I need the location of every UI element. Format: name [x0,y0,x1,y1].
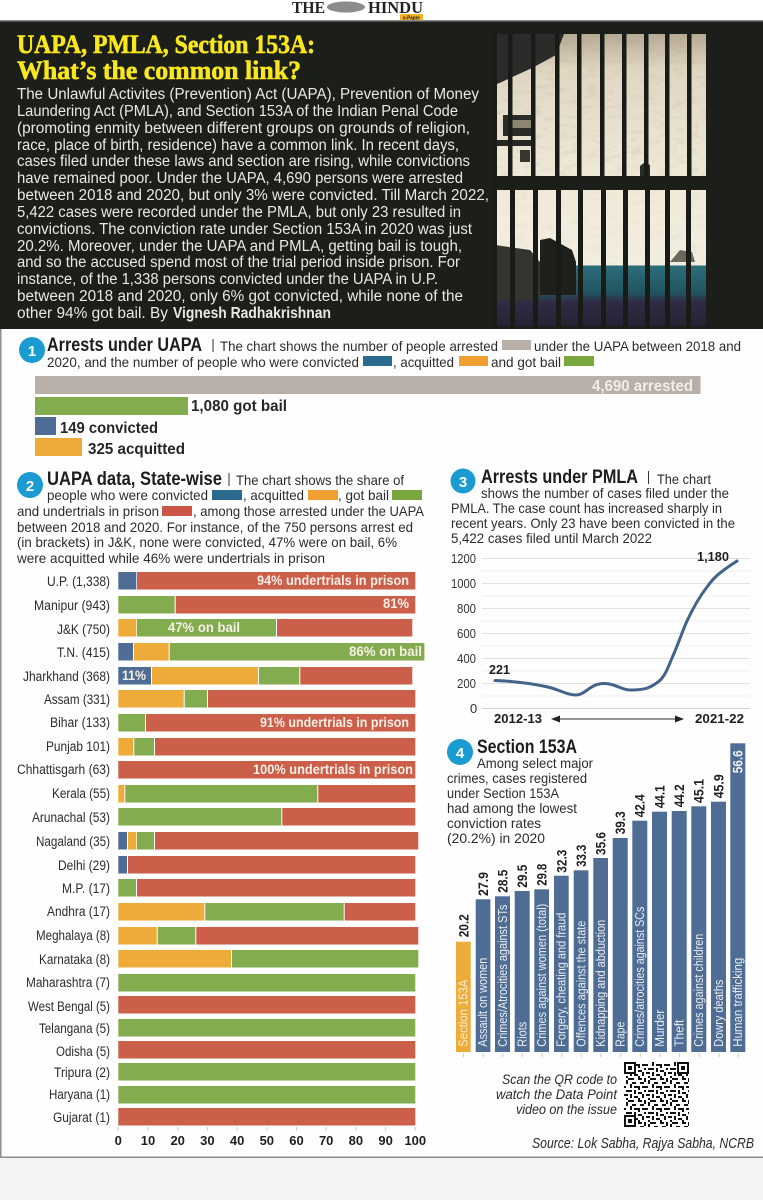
description 4: crimes, cases registered [447,770,587,786]
bar: Murder: 44.1 [652,785,668,808]
description 1: The chart shows the number of people arrested [220,338,498,354]
line chart [451,549,750,726]
intro text: Laundering Act (PMLA), and Section 153A of the Indian Penal Code [17,103,458,120]
QR call to action: Scan the QR code to [502,1072,617,1087]
intro text: race, place of birth, residence) have a common link. In recent days, [17,137,459,154]
description 4: had among the lowest [447,800,577,816]
bar: Rape: Rape [612,1022,628,1047]
arrow: timeline [551,716,684,722]
newspaper logo: e-Paper [403,16,421,22]
row: T.N. [118,643,424,660]
description 2: The chart shows the share of [236,472,404,488]
bar: Assault on women: Assault on women [475,958,490,1047]
description 2: between 2018 and 2020. For instance, of the 750 persons arrest ed [17,519,413,535]
description 1: , acquitted [393,354,454,370]
state labels: Odisha (5) [56,1044,110,1059]
line chart: 800 [457,601,476,616]
axis: percent: 100 [404,1133,426,1148]
row: Haryana [118,1086,415,1104]
state labels: Karnataka (8) [39,952,110,967]
axis: percent: 60 [289,1133,304,1148]
icon: QR code [624,1062,689,1127]
row: Arunachal [118,808,415,826]
row: Karnataka [118,950,418,968]
state labels: M.P. (17) [62,881,110,896]
photo: prison bars [491,34,706,328]
heading 2: UAPA data, State-wise [47,469,222,490]
row: J&K [118,619,412,636]
bar: Forgery, cheating and fraud: 32.3 [554,849,570,873]
row: Tripura [118,1063,415,1080]
row: J&K: 47% on bail [168,620,240,635]
state labels: J&K (750) [57,622,110,637]
bar: acquitted [35,438,185,458]
intro text: 5,422 cases were recorded under the PMLA, but only 23 resulted in [17,204,461,221]
row: Jharkhand [118,667,412,684]
row: Manipur [118,596,415,614]
QR call to action: watch the Data Point [496,1087,618,1102]
description 2: , among those arrested under the UAPA [193,503,425,519]
bar: Riots [514,864,530,1052]
state labels: Andhra (17) [47,904,110,919]
bar: Riots: Riots [514,1021,530,1047]
intro text: and so the accused spend most of the trial period inside prison. For [17,254,460,271]
bar: Forgery, cheating and fraud: Forgery, cheating and fraud [554,913,568,1047]
description 2: were acquitted while 46% were undertrials in prison [16,550,325,566]
heading 3: Arrests under PMLA [481,467,638,488]
description 2: , got bail [338,487,389,503]
bar: Crimes/Atrocities against STs: 28.5 [496,869,510,893]
intro text: (promoting enmity between different groups on grounds of religion, [17,120,470,137]
newspaper logo [0,0,763,22]
line chart: 1200 [451,551,476,566]
state labels: Punjab 101) [46,739,110,754]
description 3: recent years. Only 23 have been convicted in the [451,515,735,531]
description 4 [447,755,593,846]
row: Chhattisgarh: 100% undertrials in prison [253,762,413,777]
row: Meghalaya [118,927,418,944]
row: West Bengal [118,996,415,1014]
bar: Theft: Theft [672,1019,686,1047]
description 1: and got bail [491,354,561,370]
row: Telangana [118,1019,415,1036]
description 4: under Section 153A [447,785,560,801]
state labels: Maharashtra (7) [26,975,110,990]
QR call to action: video on the issue [516,1102,617,1117]
panel: white content area [0,329,763,1158]
row: Manipur: 81% [383,596,409,611]
line chart: 400 [457,651,476,666]
bar: Crimes/Atrocities against STs: Crimes/Atrocities against STs [495,904,510,1047]
line chart: 200 [457,676,476,691]
bar: Kidnapping and abduction [593,832,608,1052]
section 2: UAPA data state-wise [16,469,426,1148]
state labels: U.P. (1,338) [47,574,110,589]
axis: percent: 0 [115,1133,122,1148]
description 3: The chart [657,471,711,487]
bar: Rape: 39.3 [613,811,628,834]
icon: number 2 [17,472,43,498]
line chart: 221 [489,662,510,677]
description 4: conviction rates [447,815,541,831]
bar: Crimes against women (total): Crimes against women (total) [534,904,549,1047]
icon: number 1 [19,337,45,363]
row: Bihar [118,714,415,732]
bar: acquitted: 325 acquitted [88,441,185,458]
icon: number 2: 2 [26,478,34,495]
state labels: Manipur (943) [34,598,110,613]
bar: Human trafficking: Human trafficking [730,958,745,1047]
description 4: (20.2%) in 2020 [447,830,545,846]
state labels: Telangana (5) [39,1021,110,1036]
description 4: Among select major [477,755,593,771]
state labels: Kerala (55) [52,786,110,801]
state labels: Assam (331) [44,692,110,707]
description 3: shows the number of cases filed under the [481,485,729,501]
intro text [17,86,489,322]
section 3: arrests under PMLA [450,467,750,726]
line chart: 0 [470,701,477,716]
description 3 [451,471,735,546]
axis: percent [115,1127,426,1148]
axis: percent: 40 [230,1133,244,1148]
bar: Offences against the state: 33.3 [574,844,589,867]
state labels: West Bengal (5) [28,999,110,1014]
bar: arrested: 4,690 arrested [592,378,693,395]
state labels: Meghalaya (8) [36,928,110,943]
description 2: , acquitted [243,487,304,503]
intro text: The Unlawful Activites (Prevention) Act (UAPA), Prevention of Money [17,86,479,103]
section 4: Section 153A [447,737,746,1057]
icon: number 3: 3 [459,474,467,491]
state labels: Delhi (29) [58,858,110,873]
icon: number 1: 1 [28,343,36,360]
intro text: between 2018 and 2020, only 6% got convicted, while none of the [17,288,463,305]
row: Assam [118,690,415,708]
bar: Crimes against children [691,779,706,1052]
axis: percent: 30 [200,1133,215,1148]
bar: Section 153A: Section 153A [456,979,470,1047]
bar: Riots: 29.5 [515,864,530,888]
bar: Human trafficking: 56.6 [730,750,746,773]
title: What’s the common link? [17,56,301,85]
state labels: Nagaland (35) [36,834,110,849]
description 3: 5,422 cases filed until March 2022 [451,530,652,546]
bar: Assault on women: 27.9 [476,872,491,896]
row: Maharashtra [118,974,415,992]
description 3: PMLA. The case count has increased sharply in [451,500,722,516]
description 1 [47,338,741,370]
state labels: Gujarat (1) [53,1110,110,1125]
bar: Murder [652,785,668,1052]
intro text: have remained poor. Under the UAPA, 4,690 persons were arrested [17,170,463,187]
bar: Crimes/atrocities against SCs: Crimes/atrocities against SCs [632,906,647,1047]
intro text: other 94% got bail. By [17,305,168,322]
heading 1: Arrests under UAPA [47,335,202,356]
description 2: (in brackets) in J&K, none were convicted, 47% were on bail, 6% [17,534,397,550]
bar: Dowry deaths [711,774,726,1052]
intro text: cases filed under these laws and section are rising, while convictions [17,153,470,170]
bar: convicted: 149 convicted [60,420,158,437]
bar: Theft [672,784,687,1052]
row: U.P. [118,572,415,590]
axis: percent: 90 [378,1133,393,1148]
section 1: arrests under UAPA [19,335,741,458]
bar: Dowry deaths: Dowry deaths [711,979,726,1047]
icon: number 4: 4 [456,745,465,762]
state labels: Tripura (2) [54,1065,110,1080]
state labels: Arunachal (53) [32,810,110,825]
heading 4: Section 153A [477,737,577,758]
bar: got bail [35,397,287,415]
bar: Offences against the state: Offences against the state [574,921,588,1047]
state labels: Chhattisgarh (63) [17,762,110,777]
QR call to action [496,1072,618,1117]
row: Andhra [118,903,415,920]
line chart: 600 [457,626,476,641]
row: Bihar: 91% undertrials in prison [260,715,409,730]
bar: Assault on women [475,872,491,1052]
bar: got bail: 1,080 got bail [191,398,287,415]
row: Odisha [118,1041,415,1058]
axis: percent: 70 [319,1133,333,1148]
intro text: convictions. The conviction rate under Section 153A in 2020 was just [17,221,473,238]
bar: convicted [35,417,158,437]
intro text: 20.2%. Moreover, under the UAPA and PMLA, getting bail is tough, [17,238,462,255]
row: T.N.: 86% on bail [349,644,422,659]
bar chart: conviction rates [456,743,746,1057]
bar: Kidnapping and abduction: 35.6 [594,832,608,855]
bar: Crimes against children: 45.1 [692,779,706,803]
bar: Crimes against children: Crimes against children [691,934,706,1047]
bar: Human trafficking [730,743,746,1052]
intro text: Vignesh Radhakrishnan [173,305,331,322]
row: Gujarat [118,1108,415,1126]
axis: percent: 20 [170,1133,185,1148]
bar: Section 153A: 20.2 [456,914,472,937]
state labels: Haryana (1) [49,1087,110,1102]
description 2: and undertrials in prison [17,503,159,519]
icon: number 3 [450,468,476,494]
state labels: Jharkhand (368) [23,669,110,684]
row: M.P. [118,879,415,896]
title [17,30,315,85]
bar: Crimes against women (total): 29.8 [534,863,550,886]
stacked bar chart [118,572,424,1126]
state labels [17,574,110,1125]
axis: percent: 10 [141,1133,155,1148]
bar: Section 153A [456,914,472,1052]
title: UAPA, PMLA, Section 153A: [17,30,315,59]
bar: Crimes/atrocities against SCs [632,794,648,1052]
bar: arrested [35,376,700,395]
state labels: T.N. (415) [57,645,110,660]
row: Delhi [118,856,415,874]
state labels: Bihar (133) [50,715,110,730]
bar: Kidnapping and abduction: Kidnapping and abduction [593,920,608,1047]
row: Kerala [118,785,415,802]
row: Nagaland [118,832,418,850]
line chart: 1,180 [697,549,729,564]
bar: Murder: Murder [652,1009,667,1047]
axis: percent: 80 [349,1133,363,1148]
bar: Theft: 44.2 [672,784,687,807]
intro text: between 2018 and 2020, but only 3% were convicted. Till March 2022, [17,187,489,204]
row: Jharkhand: 11% [122,668,146,683]
description 1: 2020, and the number of people who were convicted [47,354,359,370]
description 2 [16,472,425,566]
row: U.P.: 94% undertrials in prison [257,573,409,588]
icon: number 4 [447,739,473,765]
description 1: under the UAPA between 2018 and [534,338,741,354]
bar: Crimes/atrocities against SCs: 42.4 [632,794,648,817]
line chart: 2012-13 [494,711,542,726]
intro text: instance, of the 1,338 persons convicted under the UAPA in U.P. [17,271,438,288]
bar: Rape [612,811,628,1052]
panel: dark header [0,20,763,329]
description 2: people who were convicted [47,487,208,503]
bar: Dowry deaths: 45.9 [712,774,726,798]
trend line [495,561,737,695]
axis: percent: 50 [260,1133,274,1148]
row: Chhattisgarh [118,761,415,778]
line chart: 2021-22 [695,711,744,726]
row: Punjab [118,738,415,756]
line chart: 1000 [451,576,476,591]
